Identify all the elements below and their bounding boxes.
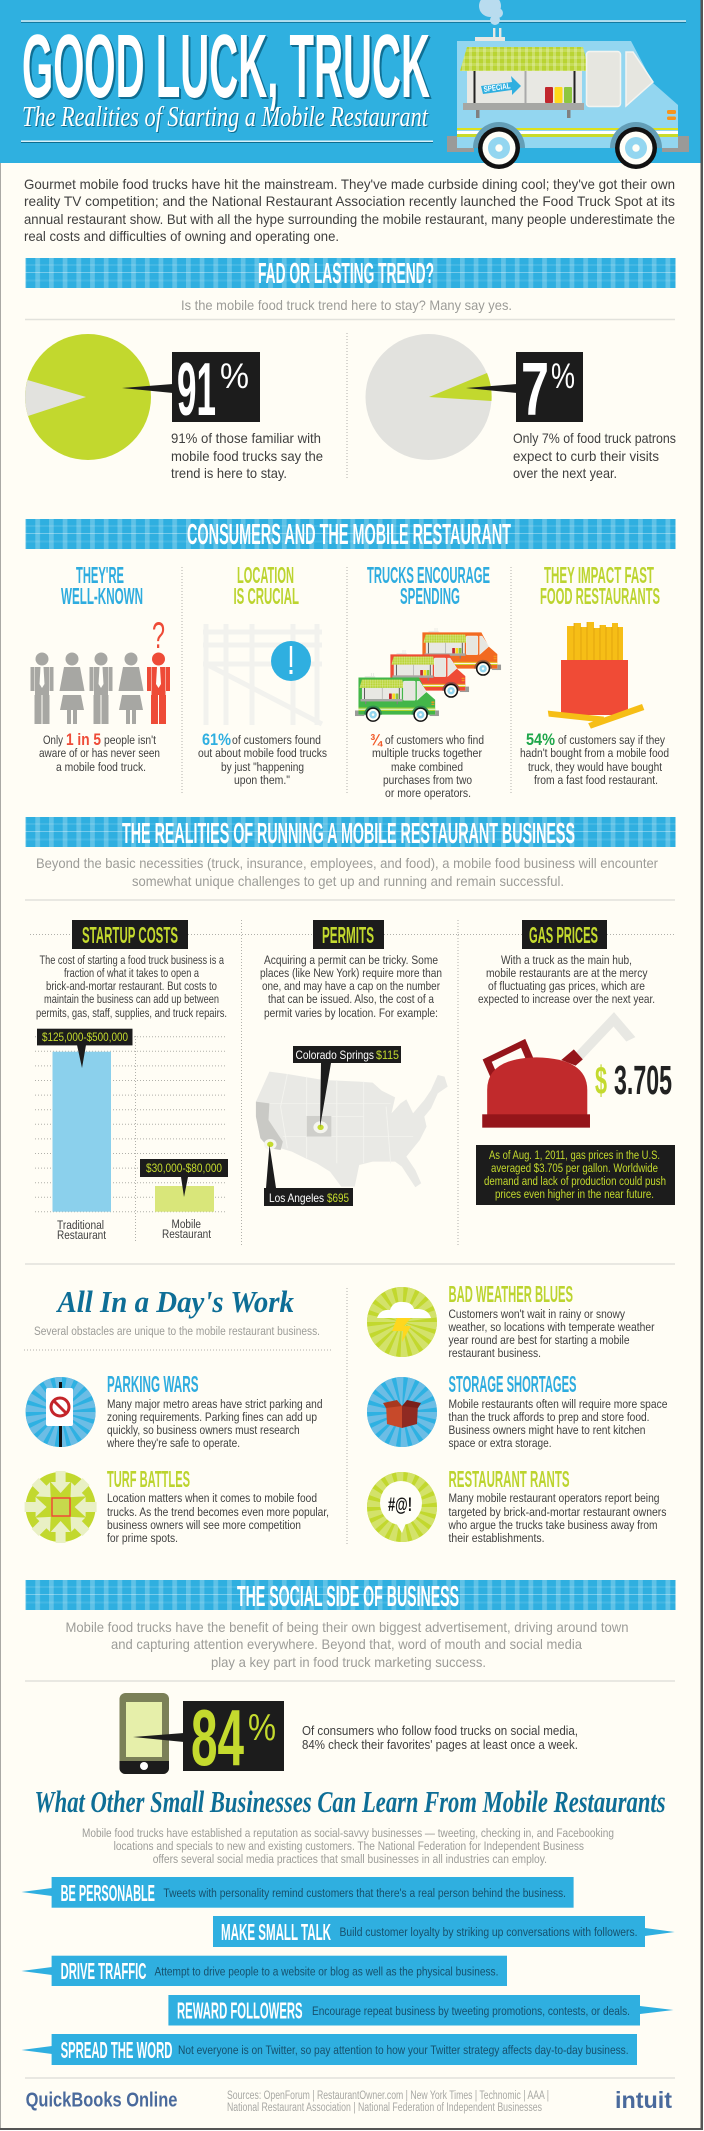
section intro: fad: Is the mobile food truck trend here to stay? Many say yes. <box>181 297 512 313</box>
callout: make small talk: MAKE SMALL TALK <box>221 1919 331 1945</box>
callout: drive traffic <box>22 1956 507 1986</box>
description: permit varies by location. For example: <box>264 1006 438 1020</box>
panel: gas prices <box>476 920 675 1205</box>
axis labels: Restaurant <box>162 1227 211 1241</box>
stat: 91 percent: 91 <box>177 347 216 431</box>
description: year round are best for starting a mobile <box>448 1333 630 1347</box>
panel: spending <box>355 562 501 800</box>
panel: location <box>198 562 327 787</box>
caption: 54% <box>526 730 555 749</box>
axis labels: Restaurant <box>57 1228 106 1242</box>
description: where they're safe to operate. <box>106 1436 240 1450</box>
description: maintain the business can add up between <box>44 992 219 1006</box>
callout: gas note: prices even higher in the near future. <box>495 1187 654 1201</box>
heading <box>313 920 384 949</box>
intro text: reality TV competition; and the National Restaurant Association recently launched the Food Truck Spot at its <box>24 193 675 209</box>
bar chart <box>35 1029 228 1242</box>
caption: of customers found <box>232 733 321 747</box>
icon: food truck <box>447 0 689 169</box>
caption: 61% <box>202 730 231 749</box>
heading <box>72 920 188 949</box>
callout: Los Angeles <box>264 1145 353 1206</box>
text block: social practices: offers several social media practices that small businesses in all industries can employ. <box>153 1852 547 1866</box>
header banner <box>0 0 700 163</box>
description: Business owners might have to rent kitchen <box>448 1423 646 1437</box>
caption <box>302 1723 578 1752</box>
caption: 91% of those familiar with <box>171 430 321 446</box>
description: With a truck as the main hub, <box>501 953 632 967</box>
heading: THEY'RE <box>76 562 124 588</box>
value label: mobile <box>140 1159 228 1197</box>
description: weather, so locations with temperate weather <box>448 1320 654 1334</box>
description <box>448 1491 666 1545</box>
panel: permits <box>256 920 448 1206</box>
text block: obstacles: Several obstacles are unique to the mobile restaurant business. <box>34 1324 320 1338</box>
description <box>106 1397 323 1450</box>
heading: SPENDING <box>400 583 460 609</box>
panel: spending: TRUCKS ENCOURAGE <box>367 562 490 588</box>
panel: restaurant rants: RESTAURANT RANTS <box>448 1466 570 1492</box>
description <box>448 1397 668 1450</box>
caption: Only 7% of food truck patrons <box>513 430 676 446</box>
panel: bad weather blues: BAD WEATHER BLUES <box>448 1281 573 1307</box>
panel: restaurant rants <box>367 1466 666 1545</box>
callout: be personable: BE PERSONABLE <box>61 1880 155 1906</box>
caption: Of consumers who follow food trucks on social media, <box>302 1723 578 1738</box>
caption: Only <box>43 733 64 747</box>
pie chart: 91 percent <box>25 334 151 460</box>
stat: 7 percent <box>366 334 676 481</box>
description: Many major metro areas have strict parking and <box>107 1397 323 1411</box>
callout: make small talk <box>213 1916 675 1947</box>
caption <box>198 730 327 787</box>
intro text: real costs and difficulties of owning and operating one. <box>24 228 339 244</box>
heading: PARKING WARS <box>107 1371 198 1397</box>
icon: gas can <box>482 1019 631 1128</box>
heading <box>234 562 299 609</box>
description: that can be issued. Also, the cost of a <box>268 992 434 1006</box>
description: Acquiring a permit can be tricky. Some <box>264 953 438 967</box>
caption: trend is here to stay. <box>171 465 287 481</box>
caption: aware of or has never seen <box>39 746 160 760</box>
icon: five people <box>30 615 170 724</box>
heading: GAS PRICES <box>529 922 598 948</box>
description: quickly, so business owners must research <box>107 1423 300 1437</box>
section intro: realities: somewhat unique challenges to get up and running and remain successful. <box>132 873 564 889</box>
section intro: social <box>66 1619 628 1670</box>
axis labels <box>57 1217 211 1242</box>
caption: ¾ <box>370 732 383 749</box>
footer brand: QuickBooks Online: QuickBooks Online <box>26 2090 177 2112</box>
section intro: social: Mobile food trucks have the benefit of being their own biggest advertisement, driving around town <box>66 1619 628 1635</box>
description: space or extra storage. <box>448 1436 552 1450</box>
callout: be personable: Tweets with personality remind customers that there's a real person behind the business. <box>163 1886 566 1900</box>
panel: bad weather blues <box>367 1281 654 1360</box>
value label: mobile: $30,000-$80,000 <box>146 1161 222 1175</box>
section intro: social: and capturing attention everywhere. Beyond that, word of mouth and social media <box>111 1636 582 1652</box>
caption: upon them." <box>234 773 290 787</box>
icon: speech bubble <box>367 1472 437 1542</box>
callout: Colorado Springs: $115 <box>376 1048 399 1062</box>
description: The cost of starting a food truck business is a <box>40 953 224 967</box>
caption: or more operators. <box>385 786 471 800</box>
caption <box>520 730 669 787</box>
text block: social practices <box>82 1826 614 1866</box>
axis labels: Mobile <box>172 1217 201 1231</box>
heading: LOCATION <box>237 562 294 588</box>
caption: by just "happening <box>221 760 304 774</box>
callout: Los Angeles: Los Angeles <box>269 1191 324 1205</box>
description: fraction of what it takes to open a <box>64 966 199 980</box>
section banner: social side: THE SOCIAL SIDE OF BUSINESS <box>237 1581 459 1613</box>
callout: Los Angeles: $695 <box>327 1191 349 1205</box>
section banner: fad or lasting trend <box>26 258 676 290</box>
callout: drive traffic: DRIVE TRAFFIC <box>61 1958 146 1984</box>
description: one, and may have a cap on the number <box>262 979 440 993</box>
callout: gas note <box>476 1145 675 1205</box>
heading <box>540 562 660 609</box>
caption: truck, they would have bought <box>528 760 662 774</box>
description: zoning requirements. Parking fines can add up <box>107 1410 317 1424</box>
heading <box>367 562 490 609</box>
heading: all in a day's work: All In a Day's Work <box>56 1284 294 1319</box>
icon: cardboard box <box>367 1377 437 1447</box>
description: trucks. As the trend becomes even more popular, <box>107 1505 329 1519</box>
caption: 1 in 5 <box>66 730 101 749</box>
heading: PERMITS <box>322 922 374 948</box>
stat: 84 percent <box>120 1693 578 1782</box>
panel: location: IS CRUCIAL <box>234 583 299 609</box>
icon: five people: ? <box>152 615 165 656</box>
callout: make small talk: Build customer loyalty by striking up conversations with followers. <box>340 1925 638 1939</box>
description: Mobile restaurants often will require more space <box>448 1397 668 1411</box>
callout: reward followers <box>168 1995 674 2026</box>
icon: speech bubble: #@! <box>388 1495 412 1516</box>
description <box>107 1491 329 1545</box>
description: permits, gas, staff, supplies, and truck repairs. <box>36 1006 227 1020</box>
description: places (like New York) require more than <box>260 966 442 980</box>
subtitle: The Realities of Starting a Mobile Restaurant <box>22 101 429 133</box>
callout: reward followers: REWARD FOLLOWERS <box>177 1998 303 2024</box>
sources: Sources: OpenForum | RestaurantOwner.com | New York Times | Technomic | AAA | <box>227 2090 549 2102</box>
pie chart: 7 percent <box>366 334 492 460</box>
footer brand: Intuit: intuit <box>615 2087 672 2113</box>
description <box>36 953 227 1020</box>
callout: spread the word: SPREAD THE WORD <box>61 2037 172 2063</box>
caption: expect to curb their visits <box>513 448 659 464</box>
heading: STARTUP COSTS <box>82 922 178 948</box>
description: restaurant business. <box>448 1346 541 1360</box>
description: of fluctuating gas prices, which are <box>488 979 645 993</box>
description: business owners will see more competition <box>107 1518 301 1532</box>
stat: 84 percent: % <box>248 1707 276 1749</box>
callout: be personable <box>22 1877 574 1908</box>
callout: reward followers: Encourage repeat business by tweeting promotions, contests, or deals. <box>312 2004 630 2018</box>
caption: multiple trucks together <box>372 746 482 760</box>
sources <box>227 2090 549 2114</box>
value label: traditional: $125,000-$500,000 <box>42 1030 128 1044</box>
callout: Colorado Springs <box>293 1046 401 1127</box>
icon: three trucks <box>355 628 501 722</box>
description: than the truck affords to prep and store food. <box>448 1410 650 1424</box>
callout: drive traffic: Attempt to drive people to a website or blog as well as the physical business. <box>154 1964 498 1978</box>
panel: startup costs <box>35 920 228 1242</box>
heading: WELL-KNOWN <box>61 583 143 609</box>
stat: 7 percent: % <box>551 357 575 396</box>
caption <box>39 730 160 774</box>
description: mobile restaurants are at the mercy <box>486 966 648 980</box>
section banner: social side <box>26 1580 676 1613</box>
caption: a mobile food truck. <box>56 760 146 774</box>
heading <box>61 562 143 609</box>
text block: social practices: locations and specials to new and existing customers. The National Federation for Independent Business <box>114 1839 584 1853</box>
icon: food truck: SPECIAL <box>483 81 511 94</box>
caption <box>370 732 484 800</box>
caption: of customers say if they <box>558 733 666 747</box>
icon: storm cloud <box>367 1287 437 1357</box>
heading <box>522 920 607 949</box>
icon: street map <box>203 624 322 725</box>
panel: turf battles <box>25 1466 329 1545</box>
value label: traditional <box>37 1029 132 1068</box>
callout: Colorado Springs: Colorado Springs <box>296 1048 374 1062</box>
caption <box>171 430 323 481</box>
section banner: fad or lasting trend: FAD OR LASTING TREND? <box>258 258 434 290</box>
callout: gas note: averaged $3.705 per gallon. Worldwide <box>491 1161 658 1175</box>
caption: people isn't <box>104 733 156 747</box>
description: Many mobile restaurant operators report being <box>448 1491 660 1505</box>
callout: spread the word <box>22 2034 637 2065</box>
caption: of customers who find <box>385 733 484 747</box>
description: their establishments. <box>448 1531 544 1545</box>
description: who argue the trucks take business away from <box>448 1518 658 1532</box>
caption: over the next year. <box>513 465 617 481</box>
caption: purchases from two <box>383 773 472 787</box>
description: for prime spots. <box>107 1531 178 1545</box>
intro text: annual restaurant show. But with all the hype surrounding the mobile restaurant, many people underestimate the <box>24 211 675 227</box>
caption <box>513 430 676 481</box>
description: targeted by brick-and-mortar restaurant owners <box>448 1505 666 1519</box>
section intro: social: play a key part in food truck marketing success. <box>211 1654 486 1670</box>
description: Customers won't wait in rainy or snowy <box>448 1307 626 1321</box>
icon: french fries <box>548 622 644 729</box>
description <box>260 953 442 1020</box>
description <box>448 1307 654 1360</box>
sources: National Restaurant Association | National Federation of Independent Businesses <box>227 2102 542 2114</box>
intro text <box>24 176 675 244</box>
caption: make combined <box>391 760 463 774</box>
map: United States <box>256 1046 448 1206</box>
panel: turf battles: TURF BATTLES <box>107 1466 190 1492</box>
description: expected to increase over the next year. <box>478 992 655 1006</box>
caption: mobile food trucks say the <box>171 448 323 464</box>
axis labels: Traditional <box>57 1218 104 1232</box>
price: $ <box>595 1059 607 1103</box>
stat: 84 percent: 84 <box>191 1693 244 1782</box>
description <box>478 953 655 1006</box>
section intro: realities <box>36 855 658 889</box>
panel: storage shortages <box>367 1371 668 1450</box>
stat: 7 percent: 7 <box>521 347 549 431</box>
caption: from a fast food restaurant. <box>534 773 658 787</box>
stat: 91 percent <box>25 334 323 481</box>
caption: out about mobile food trucks <box>198 746 327 760</box>
intro text: Gourmet mobile food trucks have hit the mainstream. They've made curbside dining cool; they've got their own <box>24 176 675 192</box>
section intro: realities: Beyond the basic necessities (truck, insurance, employees, and food), a mobile food business will encounter <box>36 855 658 871</box>
icon: phone <box>120 1693 169 1774</box>
panel: well-known <box>30 562 170 774</box>
panel: fast food <box>520 562 669 787</box>
panel: parking wars <box>26 1371 323 1450</box>
stat: 91 percent: % <box>220 357 249 396</box>
caption: 84% check their favorites' pages at least once a week. <box>302 1737 578 1752</box>
description: brick-and-mortar restaurant. But costs to <box>46 979 217 993</box>
caption: hadn't bought from a mobile food <box>520 746 669 760</box>
price <box>595 1057 672 1103</box>
icon: turf arrows <box>25 1471 97 1543</box>
description: Location matters when it comes to mobile food <box>107 1491 317 1505</box>
icon: no parking sign <box>26 1377 96 1447</box>
